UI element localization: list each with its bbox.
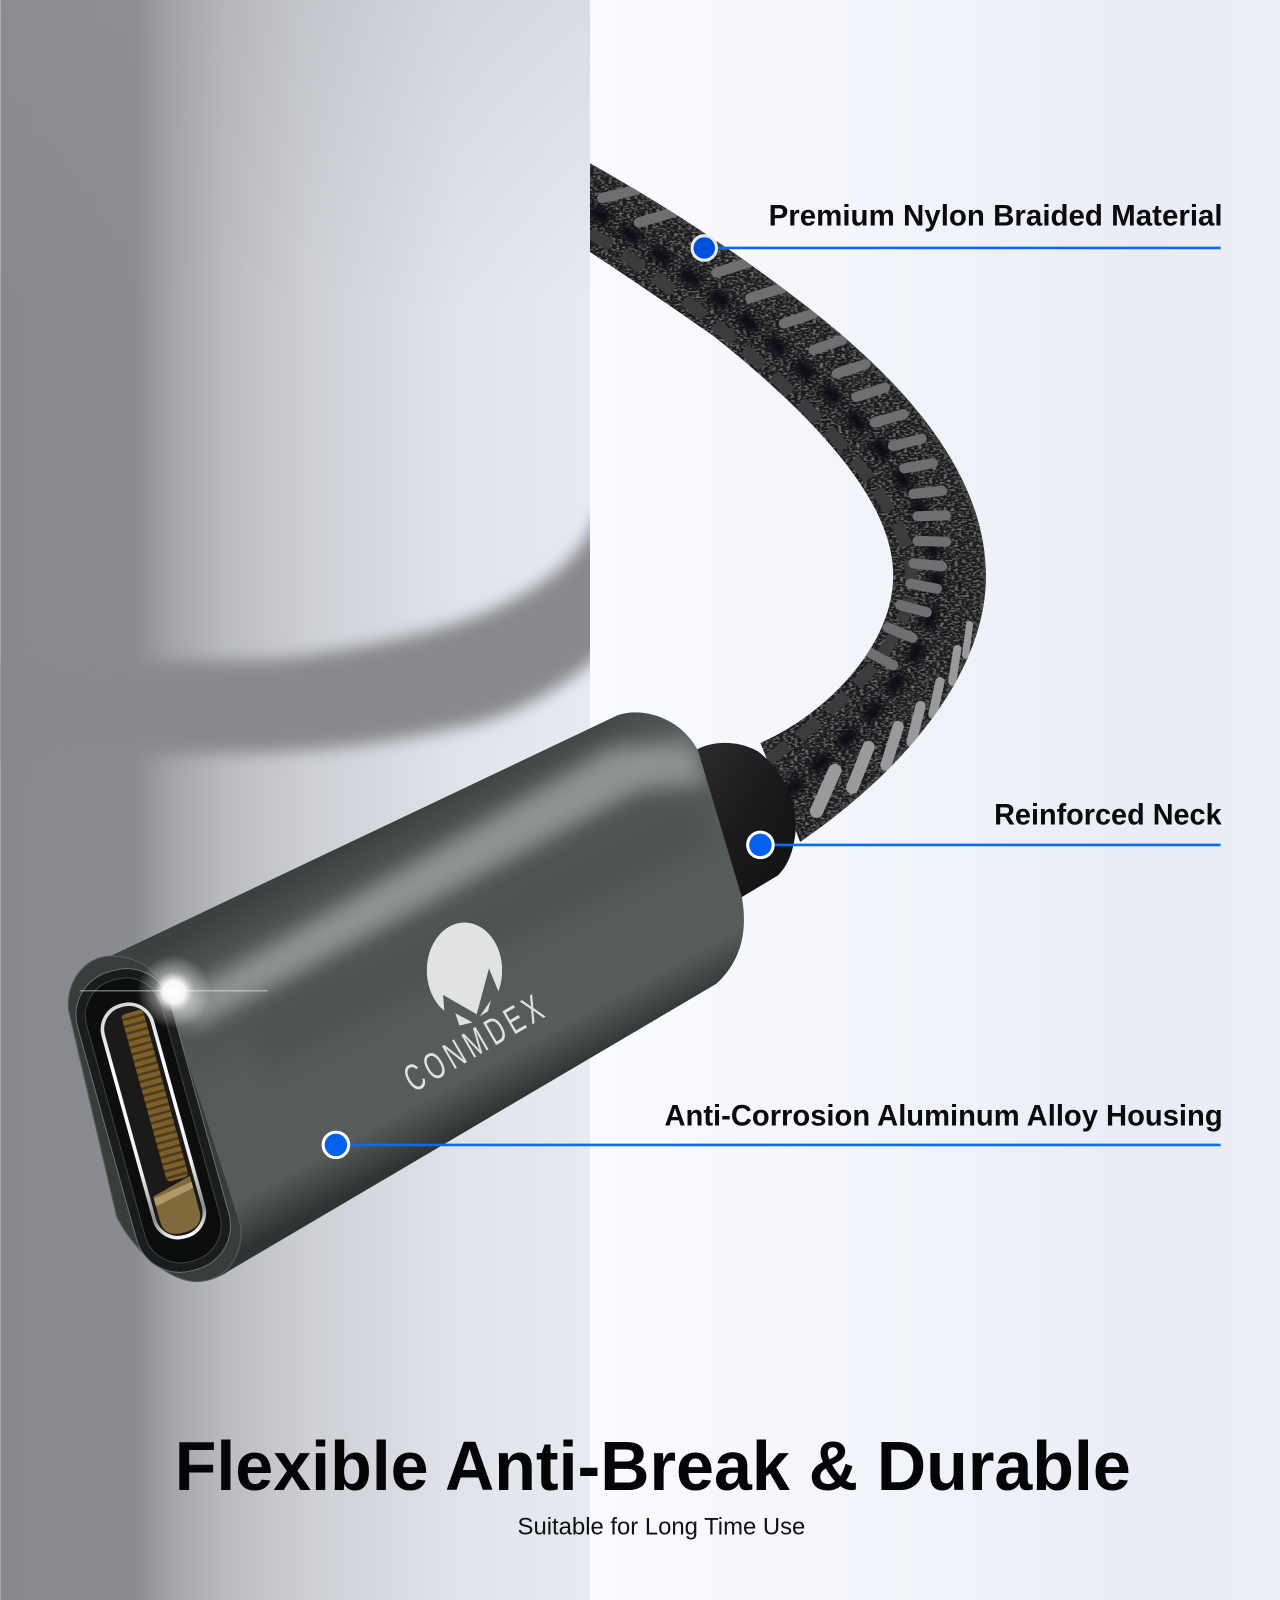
- callout: neck: Reinforced Neck: [994, 798, 1222, 831]
- callout: neck: [748, 798, 1222, 858]
- USB-C port: [97, 999, 210, 1243]
- lens glare: [80, 955, 268, 1029]
- highlight streak: [169, 743, 709, 1071]
- front rim: [68, 956, 241, 1282]
- braided cable: [590, 163, 986, 842]
- callout: nylon braid: Premium Nylon Braided Material: [769, 200, 1223, 233]
- callout: aluminum housing: Anti-Corrosion Aluminum Alloy Housing: [664, 1100, 1223, 1133]
- title: Flexible Anti-Break & Durable: [175, 1427, 1131, 1505]
- reinforced neck: [696, 743, 796, 900]
- logo mark: [427, 922, 503, 1033]
- front face with port: [66, 958, 241, 1283]
- background: left panel: [0, 0, 612, 1600]
- brand name: CONMDEX: [396, 986, 550, 1100]
- connector housing: [66, 712, 744, 1283]
- background: right panel: [590, 0, 1280, 1600]
- callout: aluminum housing: [323, 1100, 1223, 1158]
- callout: nylon braid: [692, 200, 1223, 260]
- subtitle: Suitable for Long Time Use: [518, 1514, 805, 1541]
